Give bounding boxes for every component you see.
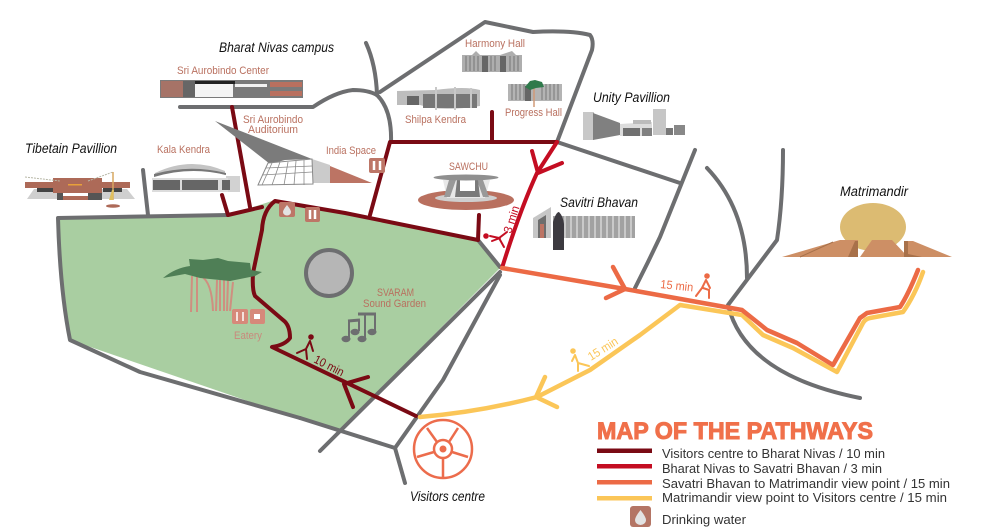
icon: drinking water <box>279 202 295 217</box>
walker: 10 min <box>297 335 313 359</box>
building: Shilpa Kendra <box>397 87 480 110</box>
building labels: Sound Garden <box>363 298 426 310</box>
icon: toilets at India Space <box>369 158 385 173</box>
legend swatches <box>597 448 652 500</box>
place names: Unity Pavillion <box>593 90 670 105</box>
building labels: Progress Hall <box>505 107 562 119</box>
building: Harmony Hall <box>462 51 522 72</box>
building: SAWCHU <box>418 174 514 210</box>
place names: Savitri Bhavan <box>560 195 638 210</box>
building: Savitri Bhavan <box>533 207 635 250</box>
building labels: Harmony Hall <box>465 38 525 50</box>
route: Savitri Bhavan to Matrimandir view point <box>502 267 918 365</box>
building: Sri Aurobindo Auditorium <box>215 121 372 185</box>
building: Progress Hall <box>508 80 562 107</box>
icon: cutlery <box>232 309 248 324</box>
building labels: SAWCHU <box>449 161 488 173</box>
tree <box>163 258 262 312</box>
legend entries: Drinking water <box>662 512 747 527</box>
building labels: Eatery <box>234 330 262 342</box>
icon: Visitors centre wheel <box>414 420 472 478</box>
building labels <box>157 38 562 342</box>
walker: yellow 15 min <box>571 349 589 371</box>
legend entries: Bharat Nivas to Savatri Bhavan / 3 min <box>662 461 882 476</box>
place names <box>25 40 908 504</box>
duration labels: 15 min <box>585 334 621 364</box>
green area: SVARAM garden <box>58 200 500 432</box>
building: Unity Pavillion <box>583 109 685 140</box>
route: Visitors centre to Bharat Nivas <box>222 107 557 416</box>
place names: Matrimandir <box>840 184 908 199</box>
duration labels: 15 min <box>660 277 694 294</box>
duration labels: 10 min <box>312 352 347 379</box>
icon: toilets near garden <box>305 207 320 222</box>
building labels: Sri Aurobindo <box>243 114 303 126</box>
legend entries: Matrimandir view point to Visitors centre / 15 min <box>662 490 947 505</box>
duration labels <box>312 204 694 379</box>
roundabout circle <box>306 250 352 296</box>
icon: music notes <box>342 313 376 342</box>
legend icon: drinking water <box>630 506 651 527</box>
walker: orange 15 min <box>696 274 710 298</box>
building: Matrimandir <box>782 203 952 257</box>
building labels: Auditorium <box>248 124 298 136</box>
legend entries: Savatri Bhavan to Matrimandir view point / 15 min <box>662 476 950 491</box>
walker: 3 min <box>484 232 507 247</box>
building: Sri Aurobindo Center <box>160 80 303 98</box>
building: Tibetain Pavillion <box>25 172 135 208</box>
route: Matrimandir view point to Visitors centre <box>420 272 923 417</box>
place names: Bharat Nivas campus <box>219 40 334 55</box>
building labels: Shilpa Kendra <box>405 114 467 126</box>
road network <box>58 22 860 483</box>
building labels: Sri Aurobindo Center <box>177 65 269 77</box>
duration labels: 3 min <box>501 204 523 235</box>
building labels: SVARAM <box>377 287 414 299</box>
building labels: India Space <box>326 145 376 157</box>
route: Bharat Nivas to Savitri Bhavan <box>502 142 562 268</box>
place names: Tibetain Pavillion <box>25 141 117 156</box>
legend entries <box>662 446 950 527</box>
place names: Visitors centre <box>410 489 485 504</box>
building: Kala Kendra <box>152 164 240 192</box>
legend title: MAP OF THE PATHWAYS <box>597 418 873 445</box>
icon: coffee cup <box>250 309 265 324</box>
legend <box>597 418 950 527</box>
legend entries: Visitors centre to Bharat Nivas / 10 min <box>662 446 885 461</box>
building labels: Kala Kendra <box>157 144 211 156</box>
